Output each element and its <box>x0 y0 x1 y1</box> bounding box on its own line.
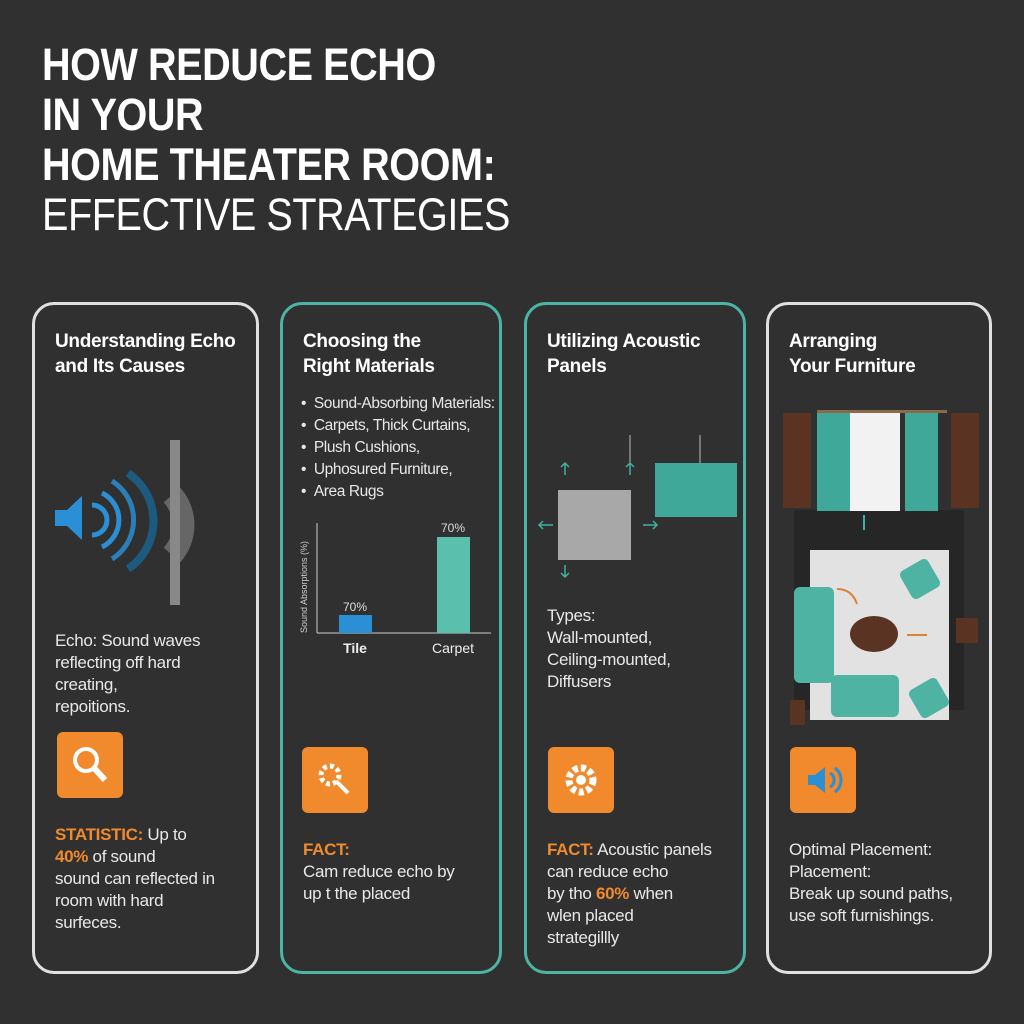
text: statistic: STATISTIC: Up to <box>55 825 187 844</box>
panel: furniture <box>766 302 992 974</box>
text: types: Diffusers <box>547 672 611 691</box>
text: list <box>301 395 495 500</box>
text: placement: Placement: <box>789 862 871 881</box>
heading <box>55 331 235 377</box>
title <box>42 39 510 240</box>
text: definition <box>55 631 200 716</box>
text: list: • Sound-Absorbing Materials: <box>301 395 495 412</box>
text: definition: Echo: Sound waves <box>55 631 200 650</box>
text: fact: up t the placed <box>303 884 410 903</box>
text: list: • Carpets, Thick Curtains, <box>301 417 470 434</box>
text: placement: use soft furnishings. <box>789 906 934 925</box>
bar chart: Carpet <box>432 640 474 656</box>
text: types: Wall-mounted, <box>547 628 652 647</box>
bar chart: 70% <box>441 521 465 535</box>
illustration: room layout <box>783 410 979 725</box>
text: definition: repoitions. <box>55 697 130 716</box>
text: statistic <box>55 825 215 932</box>
bar chart: 70% <box>343 600 367 614</box>
heading: Choosing the <box>303 331 421 352</box>
heading <box>547 331 700 377</box>
heading <box>789 331 916 377</box>
illustration: panels <box>538 435 737 578</box>
text: fact: FACT: <box>303 840 350 859</box>
text: statistic: surfeces. <box>55 913 121 932</box>
text: list: • Uphosured Furniture, <box>301 461 452 478</box>
text: placement <box>789 840 953 925</box>
title: EFFECTIVE STRATEGIES <box>42 189 510 240</box>
text: fact: wlen placed <box>547 906 633 925</box>
text: definition: reflecting off hard <box>55 653 180 672</box>
text: statistic: sound can reflected in <box>55 869 215 888</box>
text: statistic: room with hard <box>55 891 163 910</box>
heading: and Its Causes <box>55 356 185 377</box>
text: fact: by tho 60% when <box>547 884 673 903</box>
text: statistic: 40% of sound <box>55 847 155 866</box>
title: IN YOUR <box>42 89 203 140</box>
text: types <box>547 606 671 691</box>
icon: gear key <box>302 747 368 813</box>
bar chart <box>299 521 491 656</box>
text: fact: can reduce echo <box>547 862 668 881</box>
text: definition: creating, <box>55 675 118 694</box>
icon: gear <box>548 747 614 813</box>
icon: magnifier <box>57 732 123 798</box>
text: placement: Optimal Placement: <box>789 840 932 859</box>
heading: Arranging <box>789 331 877 352</box>
panel: acoustic panels <box>524 302 746 974</box>
heading <box>303 331 435 377</box>
text: list: • Area Rugs <box>301 483 383 500</box>
heading: Right Materials <box>303 356 435 377</box>
icon: speaker <box>790 747 856 813</box>
text: placement: Break up sound paths, <box>789 884 953 903</box>
heading: Your Furniture <box>789 356 915 377</box>
text: types: Ceiling-mounted, <box>547 650 671 669</box>
bar chart: Tile <box>343 640 367 656</box>
text: types: Types: <box>547 606 595 625</box>
heading: Panels <box>547 356 606 377</box>
panel: materials <box>280 302 502 974</box>
title: HOME THEATER ROOM: <box>42 139 495 190</box>
text: fact: Cam reduce echo by <box>303 862 454 881</box>
text: fact <box>547 840 712 947</box>
heading: Understanding Echo <box>55 331 235 352</box>
bar chart: Sound Absorptions (%) <box>299 541 309 633</box>
text: fact: strategillly <box>547 928 619 947</box>
text: list: • Plush Cushions, <box>301 439 420 456</box>
text: fact <box>303 840 455 903</box>
title: HOW REDUCE ECHO <box>42 39 436 90</box>
text: fact: FACT: Acoustic panels <box>547 840 712 859</box>
panel: understanding echo <box>32 302 259 974</box>
icon: speaker waves <box>55 440 194 605</box>
heading: Utilizing Acoustic <box>547 331 700 352</box>
